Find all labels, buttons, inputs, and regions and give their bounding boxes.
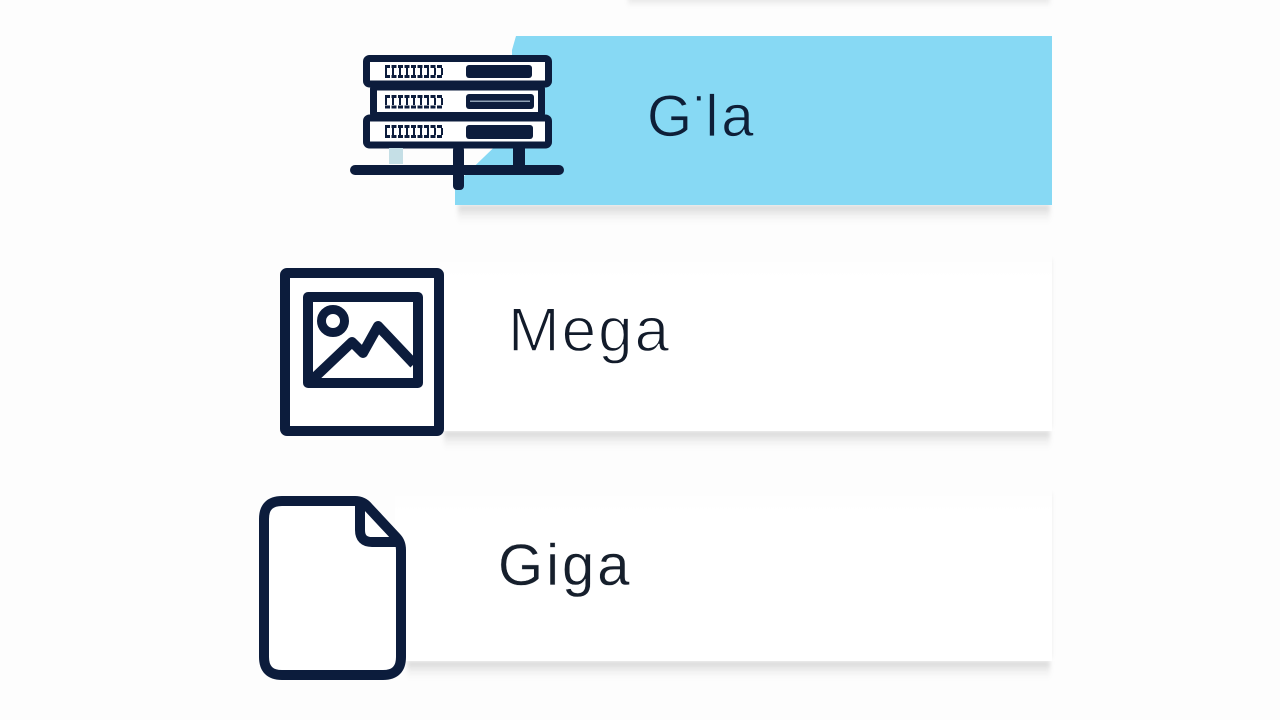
icon: server rack <box>350 55 564 190</box>
panel: top cropped bar <box>628 0 1050 7</box>
heading: Gila label: G·la <box>647 74 757 149</box>
icon: document <box>259 496 406 680</box>
heading: Giga label: Giga <box>498 533 633 598</box>
panel: giga row <box>406 661 1051 674</box>
panel: highlighted blue row <box>455 36 1052 218</box>
icon: image frame <box>280 268 444 436</box>
heading: Mega label: Mega <box>508 296 671 365</box>
panel: mega row <box>443 431 1051 444</box>
